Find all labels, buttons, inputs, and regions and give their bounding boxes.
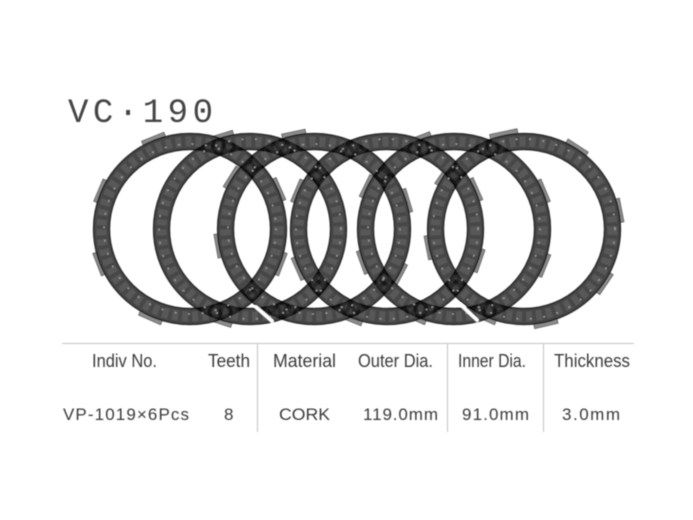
clutch friction plates illustration: [93, 129, 624, 329]
cork speckles: [104, 139, 615, 319]
table header row: Indiv No.: [92, 351, 157, 371]
table value row: CORK: [279, 405, 331, 424]
table value row: 119.0mm: [363, 405, 438, 424]
table header row: Inner Dia.: [458, 351, 526, 371]
plate friction surface: [102, 142, 612, 316]
plate edge lines: [94, 134, 620, 324]
table value row: 91.0mm: [462, 405, 529, 424]
table header row: Teeth: [208, 351, 250, 371]
cork segments: [102, 142, 612, 316]
table header row: Thickness: [554, 351, 630, 371]
white highlight slits: [256, 305, 477, 321]
table header row: Material: [273, 351, 336, 371]
table value row: 8: [224, 405, 233, 424]
specification table: [62, 343, 634, 432]
table value row: 3.0mm: [562, 405, 620, 424]
table value row: VP-1019×6Pcs: [63, 405, 189, 424]
table rules: [62, 343, 634, 432]
table header row: Outer Dia.: [358, 351, 433, 371]
plate white base: [102, 142, 612, 316]
plate tabs: [93, 129, 624, 329]
title: VC·190: [68, 95, 213, 133]
table value row: [63, 405, 620, 424]
table header row: [92, 351, 630, 371]
